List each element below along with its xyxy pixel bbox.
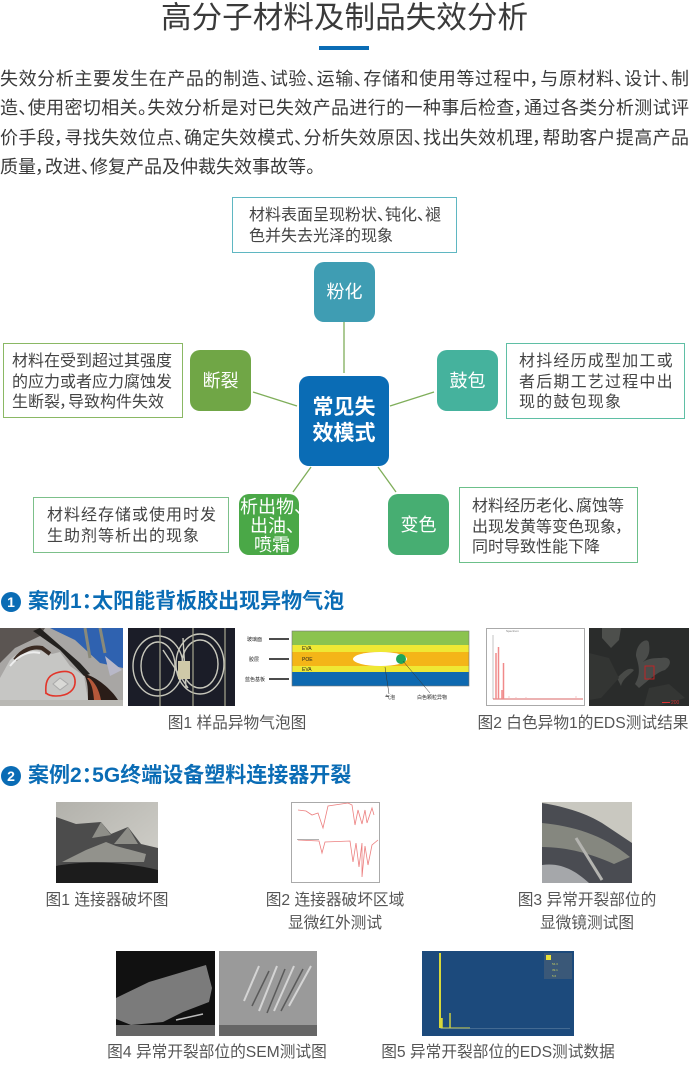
caption: connector fig 3: 图3 异常开裂部位的 xyxy=(518,892,656,909)
EDS chart dark: 5.6 xyxy=(552,974,557,978)
caption: connector fig 4: 图4 异常开裂部位的SEM测试图 xyxy=(107,1044,327,1061)
case 1 layer structure diagram: 白色颗粒异物 xyxy=(417,694,447,701)
EDS chart dark: 39.1 xyxy=(552,968,558,972)
node: exudation: 析出物、 xyxy=(240,497,312,517)
callout: powdering: 色并失去光泽的现象 xyxy=(249,228,393,244)
central node: 效模式 xyxy=(312,422,376,445)
title: 高分子材料及制品失效分析 xyxy=(161,1,528,35)
intro paragraph xyxy=(0,69,689,177)
node: fracture xyxy=(190,350,251,411)
case 1 photo: sample with red circle xyxy=(0,628,123,706)
callout: blistering: 现的鼓包现象 xyxy=(519,394,622,411)
case 1 EDS chart xyxy=(486,628,585,706)
node: blistering xyxy=(437,350,498,411)
callout: fracture: 生断裂，导致构件失效 xyxy=(12,394,164,411)
node: powdering xyxy=(314,262,375,322)
case 1 layer structure diagram: EVA xyxy=(302,667,312,673)
central node xyxy=(299,376,389,466)
callout: discoloration xyxy=(459,487,638,563)
callout: discoloration: 同时导致性能下降 xyxy=(472,539,600,556)
callout: powdering: 材料表面呈现粉状、钝化、褪 xyxy=(249,207,441,224)
node: exudation xyxy=(239,494,299,555)
callout: discoloration: 出现发黄等变色现象， xyxy=(472,518,624,536)
SEM image left xyxy=(116,951,215,1036)
EDS chart dark xyxy=(422,951,574,1036)
case 1 heading: 案例1：太阳能背板胶出现异物气泡 xyxy=(28,590,344,613)
callout: blistering: 者后期工艺过程中出 xyxy=(519,374,674,390)
caption: connector fig 3: 显微镜测试图 xyxy=(540,915,634,932)
intro paragraph: 价手段，寻找失效位点、确定失效模式、分析失效原因、找出失效机理，帮助客户提高产品 xyxy=(0,128,689,148)
node: powdering: 粉化 xyxy=(326,282,362,302)
node: discoloration: 变色 xyxy=(400,514,436,534)
callout: blistering xyxy=(506,343,685,419)
connector lines xyxy=(252,322,434,492)
infrared spectra xyxy=(291,802,380,883)
EDS chart dark: 54.3 xyxy=(552,962,558,966)
node: blistering: 鼓包 xyxy=(450,370,486,390)
node: exudation: 出油、 xyxy=(250,516,304,536)
node: fracture: 断裂 xyxy=(202,370,238,390)
microscope photo xyxy=(542,802,632,883)
caption: connector fig 2 xyxy=(266,891,404,932)
case 1 layer structure diagram: EVA xyxy=(302,646,312,652)
caption: connector fig 2: 显微红外测试 xyxy=(288,915,382,932)
SEM image right xyxy=(219,951,317,1036)
callout: discoloration: 材料经历老化、腐蚀等 xyxy=(472,498,624,515)
number badge 1: 1 xyxy=(7,594,15,610)
callout: exudation xyxy=(33,497,229,553)
connector damage photo xyxy=(56,802,158,883)
callout: powdering xyxy=(232,197,457,253)
case 2 heading: 案例2：5G终端设备塑料连接器开裂 xyxy=(28,764,351,787)
callout: fracture xyxy=(3,343,183,418)
case 1 layer structure diagram: POE xyxy=(302,657,313,663)
node: discoloration xyxy=(388,494,449,555)
case 1 photo: bubble sample on dark grid xyxy=(128,628,235,706)
callout: fracture: 的应力或者应力腐蚀发 xyxy=(12,374,172,390)
diagram: common failure modes xyxy=(3,197,685,563)
node: exudation: 喷霜 xyxy=(254,535,290,555)
callout: exudation: 生助剂等析出的现象 xyxy=(47,528,200,544)
central node: 常见失 xyxy=(312,396,376,419)
intro paragraph: 质量，改进、修复产品及仲裁失效事故等。 xyxy=(0,157,315,177)
caption: connector fig 1: 图1 连接器破坏图 xyxy=(46,892,168,909)
caption: connector fig 2: 图2 连接器破坏区域 xyxy=(266,892,404,909)
number badge 2: 2 xyxy=(7,768,15,784)
case 1 SEM image: 200 xyxy=(671,700,680,706)
case 1 EDS chart: Spectrum xyxy=(506,629,519,633)
callout: blistering: 材抖经历成型加工或 xyxy=(519,353,674,370)
caption: connector fig 3 xyxy=(518,891,656,932)
case 1 layer structure diagram xyxy=(245,630,470,701)
number badge 2 xyxy=(1,766,21,786)
case 1 layer structure diagram: 气泡 xyxy=(385,694,395,701)
case 1 layer structure diagram: 玻璃面 xyxy=(247,636,262,643)
caption: connector fig 5: 图5 异常开裂部位的EDS测试数据 xyxy=(381,1044,615,1061)
intro paragraph: 造、使用密切相关。失效分析是对已失效产品进行的一种事后检查，通过各类分析测试评 xyxy=(0,98,689,118)
caption: fig 1: 图1 样品异物气泡图 xyxy=(168,715,306,732)
intro paragraph: 失效分析主要发生在产品的制造、试验、运输、存储和使用等过程中，与原材料、设计、制 xyxy=(0,69,689,89)
title accent bar xyxy=(319,46,369,50)
callout: exudation: 材料经存储或使用时发 xyxy=(47,507,217,524)
number badge 1 xyxy=(1,592,21,612)
caption: fig 2: 图2 白色异物1的EDS测试结果 xyxy=(478,715,688,732)
callout: fracture: 材料在受到超过其强度 xyxy=(12,353,172,370)
case 1 SEM image xyxy=(589,628,689,706)
case 1 layer structure diagram: 蓝色基板 xyxy=(245,676,265,683)
case 1 layer structure diagram: 胶层 xyxy=(249,656,259,663)
